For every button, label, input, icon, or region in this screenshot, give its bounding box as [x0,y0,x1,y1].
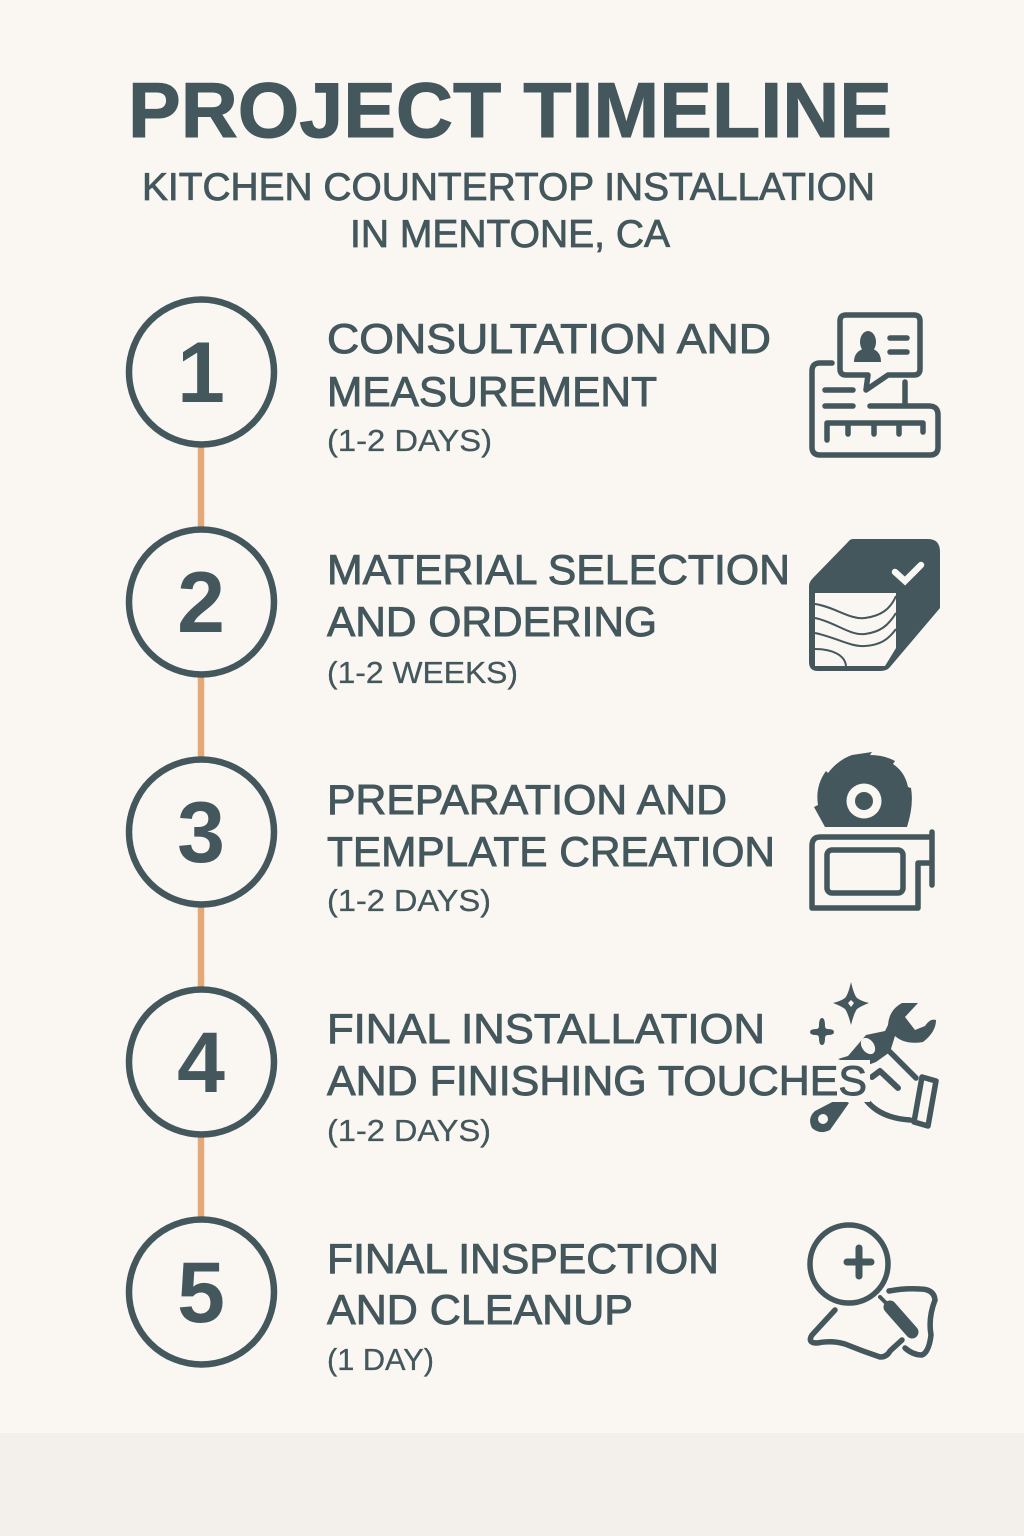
duration: step 5: (1 DAY) [327,1342,434,1377]
heading: step 2 [327,546,790,645]
subtitle: KITCHEN COUNTERTOP INSTALLATION [142,166,875,209]
heading: step 4 [327,1005,870,1104]
heading: step 1: CONSULTATION AND [327,315,771,362]
heading: step 3: PREPARATION AND [327,776,727,823]
heading: step 5: AND CLEANUP [327,1286,633,1333]
heading: step 1: MEASUREMENT [327,368,657,415]
heading: step 4: AND FINISHING TOUCHES [327,1057,867,1104]
heading: step 5 [327,1235,719,1333]
subtitle: IN MENTONE, CA [350,213,670,256]
title: PROJECT TIMELINE [128,66,892,154]
number badge 1: 1 [177,325,225,421]
number badge 3 [129,760,274,904]
duration: step 3: (1-2 DAYS) [327,883,491,918]
number badge 2: 2 [177,555,225,651]
duration: step 2: (1-2 WEEKS) [327,655,518,690]
heading: step 2: AND ORDERING [327,598,657,645]
number badge 4 [129,990,274,1134]
subtitle [142,166,875,256]
heading: step 3: TEMPLATE CREATION [327,828,775,875]
number badge 2 [129,530,274,674]
icon: material slab with check [809,539,940,671]
number badge 1 [129,300,274,444]
panel: step 1 consultation and measurement [129,300,938,458]
number badge 3: 3 [177,785,225,881]
icon: wrench, hand and sparkles [810,982,936,1132]
heading: step 1 [327,315,771,415]
heading: step 5: FINAL INSPECTION [327,1235,719,1282]
panel: step 3 preparation and template creation [129,752,932,918]
icon: saw blade and template frame [812,752,932,908]
icon: magnifying glass and cloth [810,1225,935,1357]
icon: speech bubble with profile and ruler [812,315,938,455]
panel: step 4 final installation and finishing touches [129,982,936,1148]
number badge 5 [129,1220,274,1364]
panel: step 2 material selection and ordering [129,530,940,690]
heading: step 4: FINAL INSTALLATION [327,1005,765,1052]
duration: step 1: (1-2 DAYS) [327,423,492,458]
number badge 4: 4 [177,1015,225,1111]
panel: step 5 final inspection and cleanup [129,1220,935,1377]
duration: step 4: (1-2 DAYS) [327,1113,491,1148]
heading: step 2: MATERIAL SELECTION [327,546,790,593]
number badge 5: 5 [177,1245,225,1341]
timeline connectors [198,445,204,1220]
heading: step 3 [327,776,775,875]
